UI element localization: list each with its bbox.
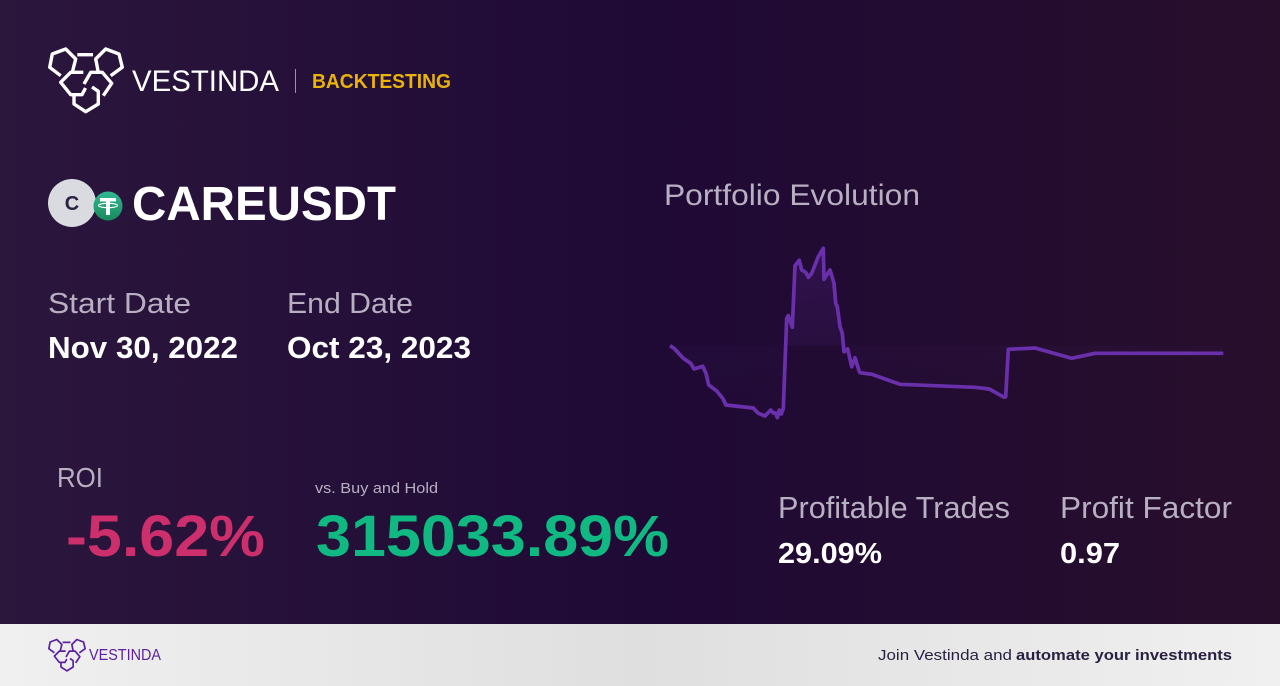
chart area fill bbox=[670, 248, 1223, 418]
section label: BACKTESTING bbox=[312, 71, 451, 93]
end date: End Date bbox=[287, 288, 413, 320]
profit factor metric: Profit Factor bbox=[1060, 490, 1232, 525]
vs. buy and hold metric: 315033.89% bbox=[316, 504, 669, 569]
pair heading with coin icons bbox=[48, 178, 396, 231]
profit factor metric: 0.97 bbox=[1060, 538, 1120, 570]
portfolio evolution chart bbox=[664, 179, 1223, 418]
end date bbox=[287, 288, 471, 365]
ROI metric: -5.62% bbox=[66, 504, 265, 569]
vs. buy and hold metric bbox=[315, 480, 669, 569]
chart line bbox=[670, 248, 1223, 418]
profit factor metric bbox=[1060, 490, 1232, 570]
pair name: CAREUSDT bbox=[132, 178, 396, 231]
header: logo and section label bbox=[50, 49, 451, 112]
start date bbox=[48, 288, 238, 365]
footer call to action: Join Vestinda and bbox=[878, 647, 1012, 664]
end date: Oct 23, 2023 bbox=[287, 330, 471, 365]
chart title: Portfolio Evolution bbox=[664, 179, 920, 212]
profitable trades metric: Profitable Trades bbox=[778, 490, 1010, 525]
footer wordmark: VESTINDA bbox=[89, 647, 162, 664]
ROI metric: ROI bbox=[57, 462, 103, 493]
icon: CARE coin: C bbox=[65, 193, 79, 215]
footer call to action bbox=[878, 647, 1232, 664]
icon: Tether coin bbox=[94, 192, 122, 220]
start date: Nov 30, 2022 bbox=[48, 330, 238, 365]
start date: Start Date bbox=[48, 288, 191, 320]
footer bar bbox=[0, 624, 1280, 686]
ROI metric bbox=[57, 462, 265, 569]
icon: Vestinda hexagon logo bbox=[50, 49, 122, 112]
icon: CARE coin bbox=[48, 179, 96, 227]
vs. buy and hold metric: vs. Buy and Hold bbox=[315, 480, 438, 497]
profitable trades metric bbox=[778, 490, 1010, 570]
logo wordmark: VESTINDA bbox=[132, 65, 279, 98]
profitable trades metric: 29.09% bbox=[778, 538, 882, 570]
footer call to action: automate your investments bbox=[1016, 647, 1232, 664]
icon: footer Vestinda logo bbox=[49, 640, 85, 671]
